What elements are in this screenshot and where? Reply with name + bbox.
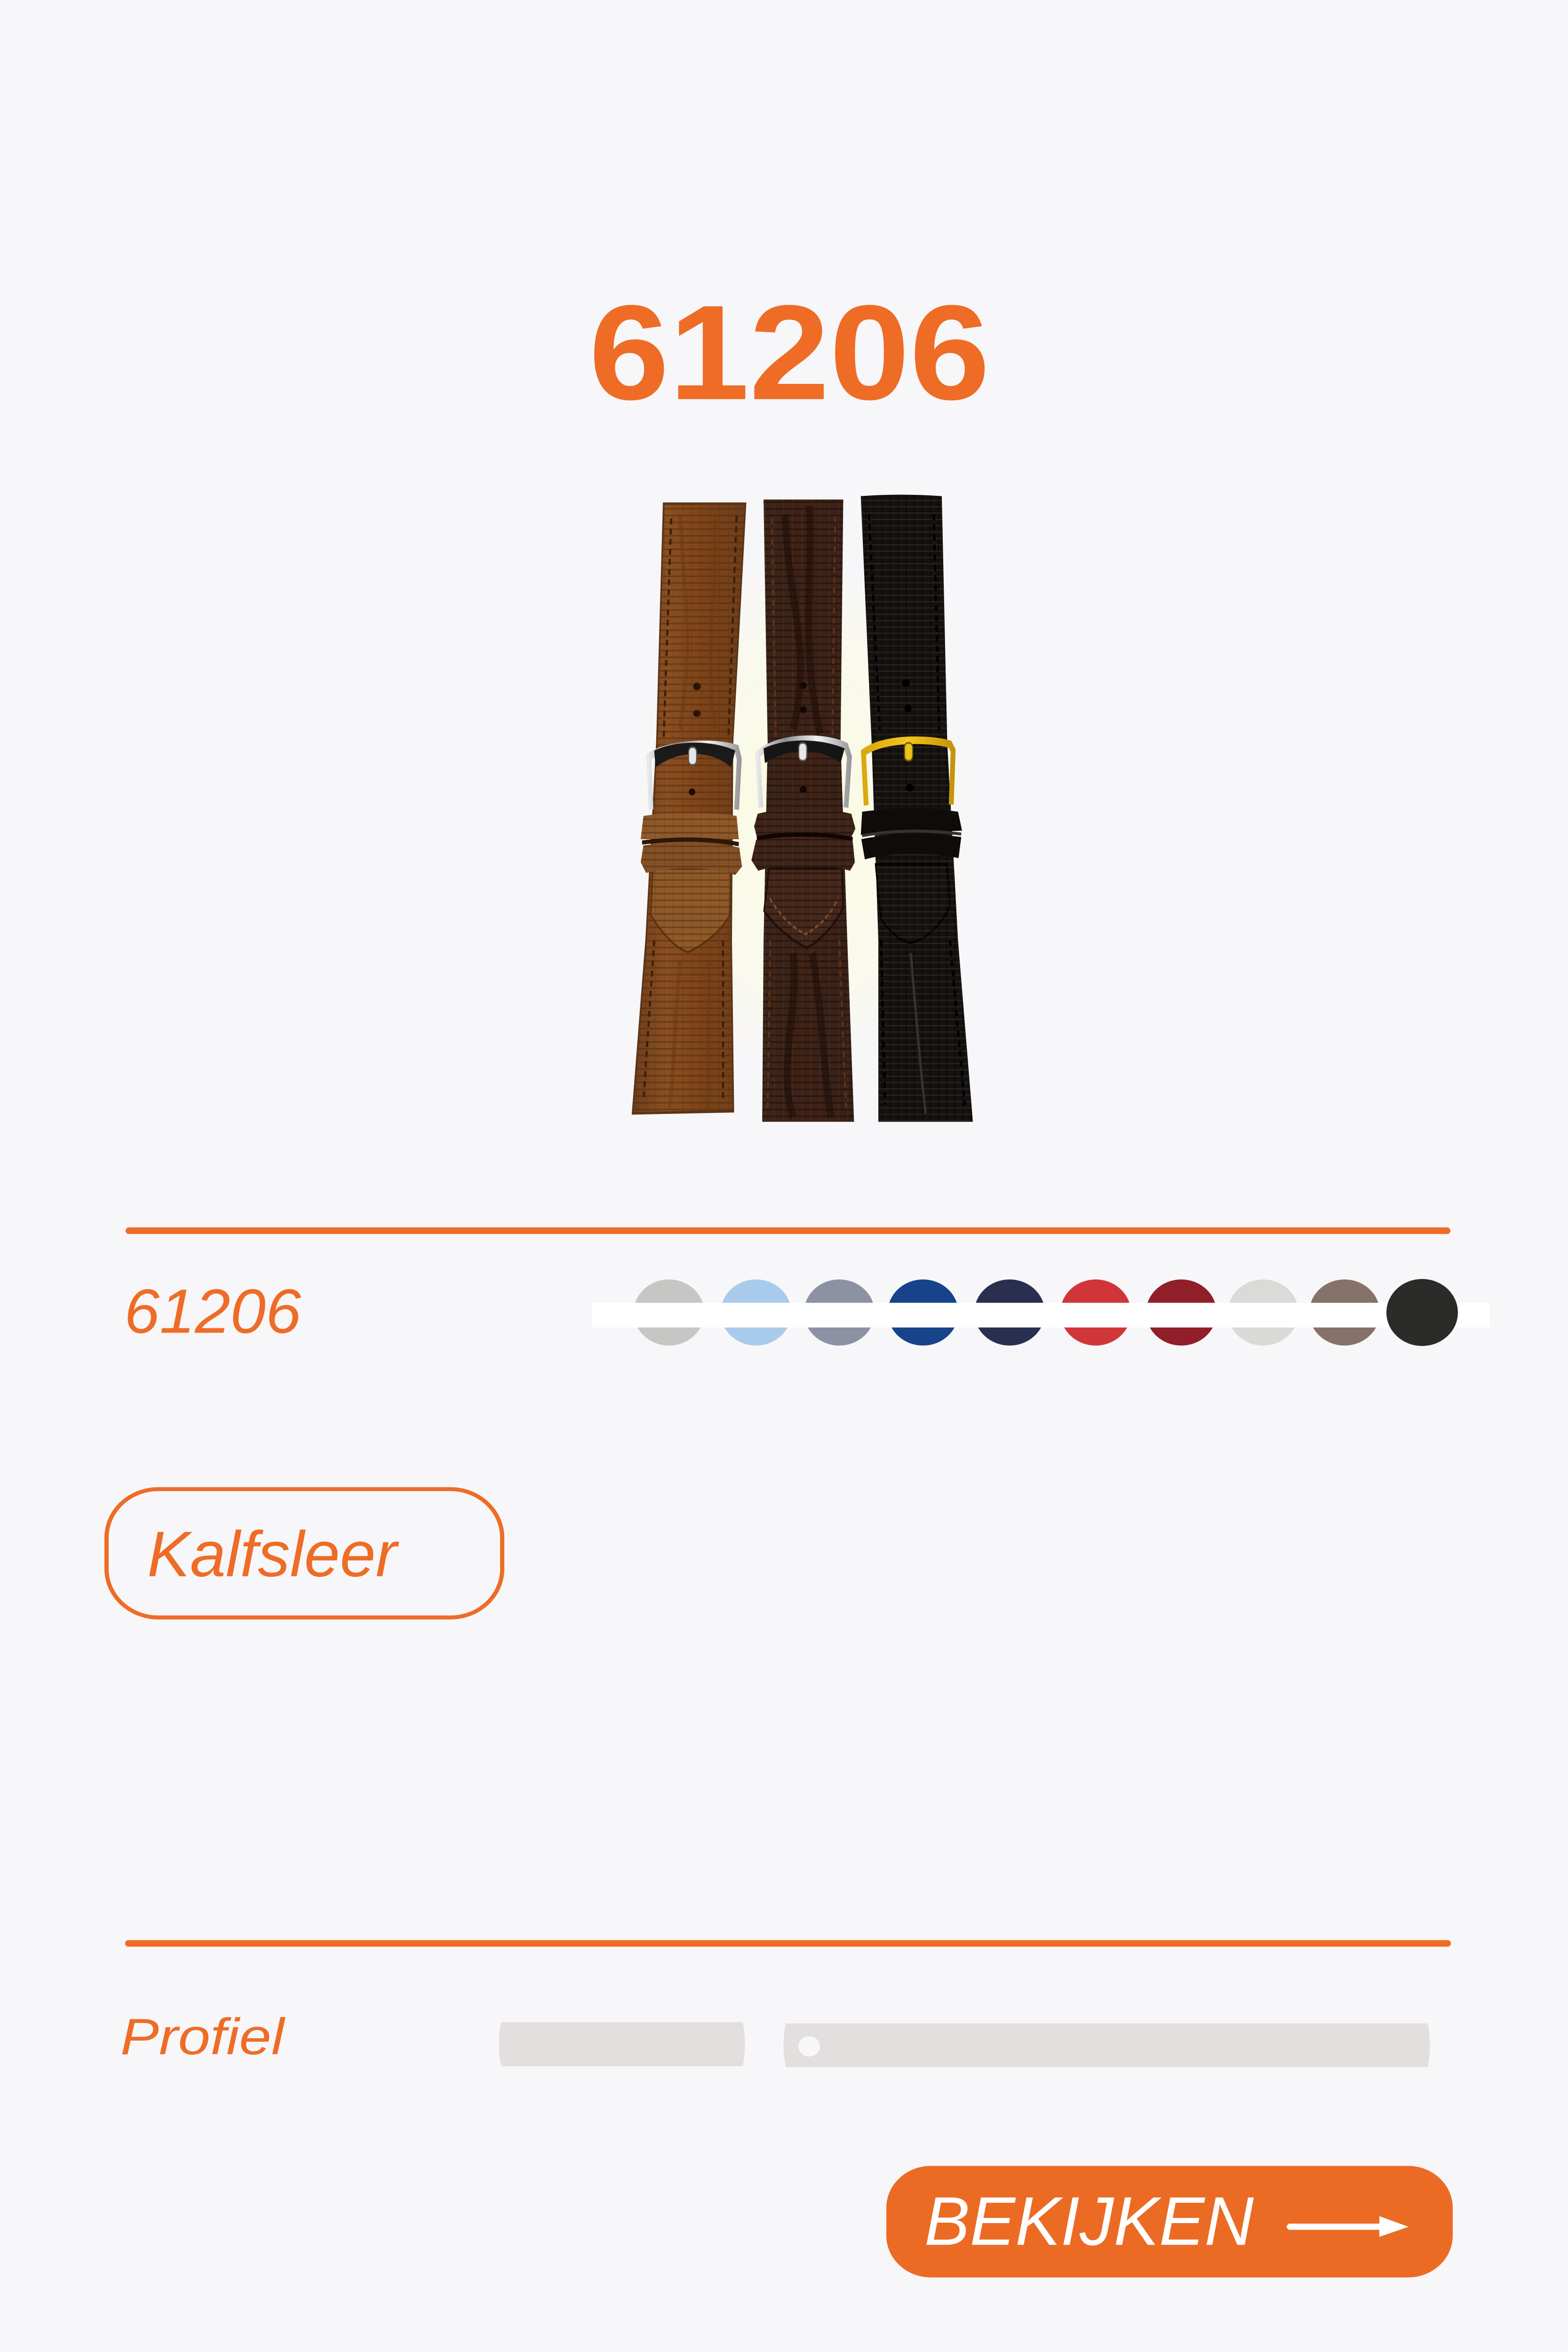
divider: top orange rule (126, 1227, 1450, 1234)
material tag: Kalfsleer: Kalfsleer (147, 1518, 399, 1590)
divider: bottom orange rule (125, 1940, 1451, 1947)
buckle: silver (649, 745, 739, 810)
profile shape: short segment (499, 2022, 745, 2066)
profile shape: long segment with hole (784, 2024, 1430, 2067)
strap: brown (633, 504, 746, 1113)
title: 61206 (589, 277, 990, 428)
button: BEKIJKEN (886, 2166, 1453, 2278)
model number label: 61206 (124, 1276, 301, 1346)
colour swatches (592, 1279, 1490, 1346)
strap: black (861, 495, 973, 1122)
profile label: Profiel (120, 2008, 286, 2065)
material tag: Kalfsleer (106, 1489, 502, 1617)
arrow (1287, 2216, 1409, 2237)
photo: three leather watch straps (631, 495, 977, 1122)
buckle: gold (863, 740, 953, 805)
button: BEKIJKEN: BEKIJKEN (924, 2183, 1254, 2260)
buckle: silver (757, 739, 850, 808)
strap: dark brown (751, 500, 855, 1122)
